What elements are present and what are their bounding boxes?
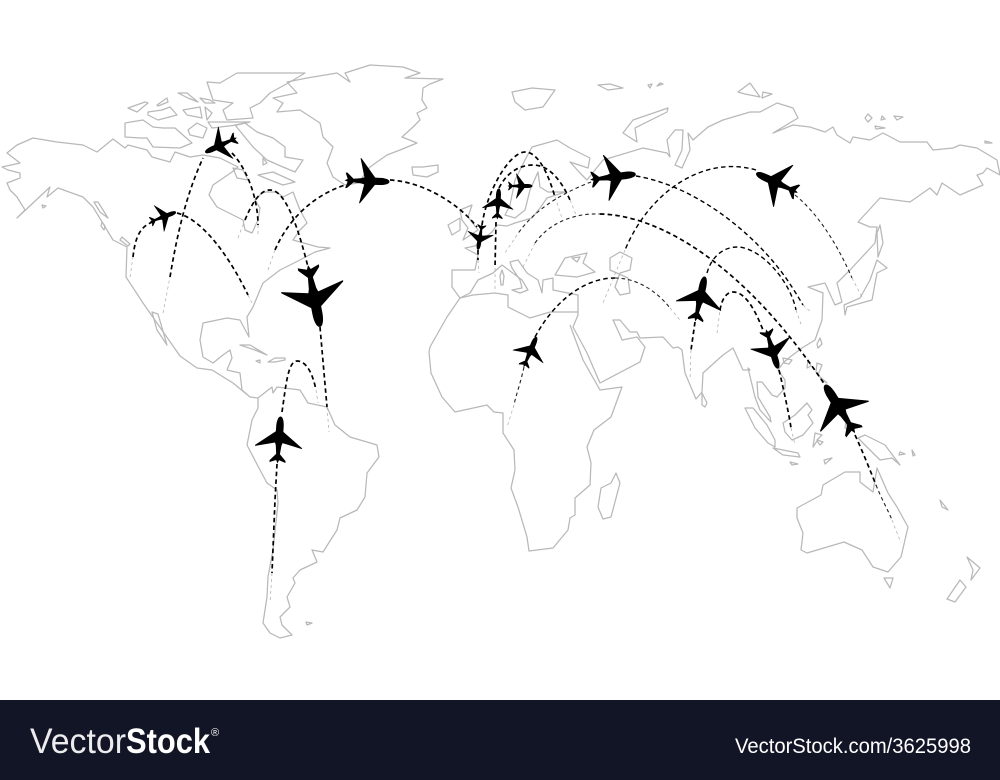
route: Hudson Bay to US east xyxy=(238,190,308,267)
route: Germany to Italy xyxy=(495,222,496,290)
landmass: Iceland xyxy=(412,165,438,177)
route: Balkans to Southeast Asia xyxy=(523,214,825,385)
landmass: small Pacific islands xyxy=(306,450,948,625)
logo: VectorStock xyxy=(30,722,219,761)
icon: plane over Canada xyxy=(198,122,244,168)
landmass: South Asian and Southeast Asian islands xyxy=(702,338,848,457)
route: plane to India xyxy=(690,322,695,380)
icon: plane over Russia xyxy=(587,151,639,203)
sea: Caspian and Black Sea xyxy=(555,252,632,295)
route: Canada to Hudson Bay xyxy=(232,153,258,235)
landmass: Caribbean islands xyxy=(240,345,285,363)
landmass: Greenland xyxy=(273,65,443,185)
icon: plane over western Canada xyxy=(145,199,181,235)
icon: plane over Philippines, large xyxy=(801,370,879,448)
route: Mexico to Canada xyxy=(163,158,203,313)
route: US east to Atlantic xyxy=(268,185,345,270)
route: US west coast to plane xyxy=(130,222,153,277)
icon: plane over Atlantic coast, large xyxy=(277,259,351,333)
landmass: Pacific coast islands xyxy=(42,202,130,246)
logo: VectorStock: ® xyxy=(211,727,219,739)
landmass: Eurasia xyxy=(452,103,1000,422)
route: Peru to Chile xyxy=(270,464,277,603)
landmass: Great Britain and Ireland xyxy=(448,205,478,240)
route: Indochina to Indonesia xyxy=(779,370,795,445)
image id text: VectorStock.com/3625998 xyxy=(735,735,971,758)
icon: plane over Siberia xyxy=(746,152,808,214)
landmass: Arctic islands of Eurasia xyxy=(512,83,992,143)
icon: plane over Sudan xyxy=(508,330,552,374)
route: France south xyxy=(478,250,479,273)
route: Middle East to India xyxy=(535,278,680,337)
airplanes xyxy=(145,122,879,465)
landmass: New Zealand xyxy=(947,557,980,602)
route: Russia to central Europe xyxy=(505,182,591,253)
icon: plane over Indochina xyxy=(746,323,798,375)
route: India to Indochina xyxy=(717,292,763,333)
landmass: Mediterranean islands xyxy=(500,270,504,285)
route: Peru to Caribbean arc xyxy=(282,361,318,412)
icon: plane over Greenland coast xyxy=(344,158,390,204)
footer bar xyxy=(0,700,1000,780)
landmass: Japan and Sakhalin xyxy=(844,225,887,315)
icon: plane over North Sea xyxy=(482,188,514,220)
route: Atlantic to Europe xyxy=(390,180,477,227)
route: Siberia to Caspian xyxy=(603,167,756,303)
route: Sudan to Africa xyxy=(507,367,524,427)
landmass: Madagascar xyxy=(598,473,620,519)
icon: plane over France xyxy=(465,222,495,252)
icon: plane over Sweden xyxy=(508,174,532,198)
route: Scandinavian arc two xyxy=(499,165,577,217)
route: Siberia to Japan xyxy=(795,195,862,297)
route: India to East Asia xyxy=(707,247,802,327)
landmass: Baja California xyxy=(152,312,167,345)
landmass: Africa xyxy=(429,293,622,551)
icon: plane over Peru xyxy=(254,415,304,465)
logo: VectorStock: Vector xyxy=(30,722,126,761)
route: plane to US southeast xyxy=(177,213,252,303)
landmass: Australia xyxy=(797,468,908,572)
route: big plane to South America xyxy=(320,327,329,432)
flight routes xyxy=(130,152,901,603)
landmass: Tasmania xyxy=(884,578,893,588)
logo: VectorStock: Stock xyxy=(126,722,210,761)
route: Scandinavian arc one xyxy=(482,152,562,225)
route: Philippines to Australia xyxy=(855,435,901,543)
world map outline xyxy=(2,65,1000,638)
route: Russia to China xyxy=(636,176,812,313)
landmass: North America xyxy=(2,138,379,638)
landmass: Canadian arctic islands xyxy=(125,73,305,185)
landmass: New Guinea xyxy=(858,435,900,465)
icon: plane over central Asia xyxy=(673,272,727,326)
